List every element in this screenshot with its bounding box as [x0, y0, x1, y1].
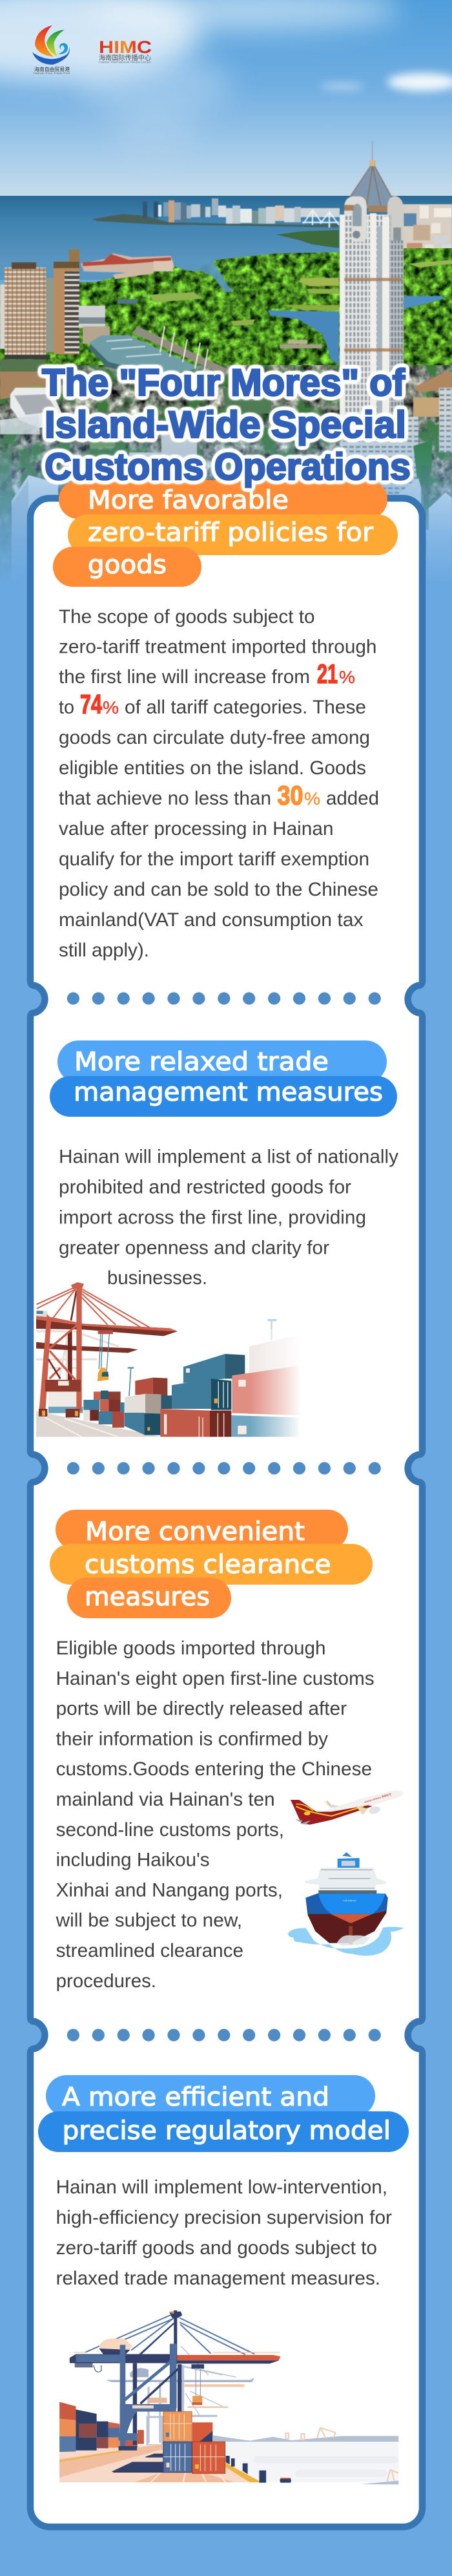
right-side distant city [403, 204, 452, 248]
fade-out to white [250, 1329, 302, 1439]
section 1 heading pills: goods [88, 551, 167, 580]
section 1 body text: % [103, 698, 119, 717]
small container stacks [83, 1391, 125, 1428]
logo: Hainan Free Trade Port [32, 25, 70, 75]
crane legs and braces [39, 1314, 51, 1409]
main title: Customs Operations [45, 446, 411, 488]
arena roof and boulevard [89, 326, 226, 378]
section 3 body text: Xinhai and Nangang ports, [56, 1879, 283, 1901]
upper boom [36, 1316, 178, 1336]
illustration: blue port crane and quay [59, 2310, 398, 2484]
hero photo: coastal city skyline [0, 0, 452, 585]
section 1 body text: that achieve no less than [59, 788, 271, 809]
section 2 body text: prohibited and restricted goods for [59, 1176, 351, 1198]
section 1 body text: 74 [80, 689, 102, 719]
logo: HIMC: Hainan International Media Center [99, 61, 152, 63]
hoist and load [99, 1333, 109, 1372]
quay ground [59, 2444, 262, 2482]
section 1 body text: added [326, 788, 379, 809]
stacked containers left [59, 2402, 144, 2452]
section 1 body text: mainland(VAT and consumption tax [59, 909, 364, 931]
logo: HIMC: 海南国际传播中心 [99, 54, 151, 62]
section 3 heading pills: More convenient [85, 1517, 305, 1547]
hoist and load [191, 2364, 204, 2369]
main title: Island-Wide Special [45, 404, 406, 446]
left residential towers [0, 249, 110, 359]
section 2 body text: Hainan will implement a list of nationally [59, 1146, 398, 1167]
section 2 heading pills [50, 1040, 397, 1117]
section 3 body text: Hainan's eight open first-line customs [56, 1668, 375, 1689]
section 1 body text: 30 [278, 780, 303, 810]
foreground city blocks [0, 365, 452, 558]
section 1 body text: goods can circulate duty-free among [59, 727, 370, 748]
section 3 body text: procedures. [56, 1970, 156, 1992]
section 3 body text: will be subject to new, [56, 1910, 242, 1931]
section 1 body text: value after processing in Hainan [59, 818, 333, 839]
section 3 body text: second-line customs ports, [56, 1819, 284, 1841]
section 1 body text: to [59, 697, 74, 718]
tall pyramid-topped tower [340, 141, 404, 421]
section 1 body text: qualify for the import tariff exemption [59, 849, 369, 870]
section 3 body text: ports will be directly released after [56, 1698, 347, 1720]
section 2 body text: businesses. [107, 1267, 207, 1289]
ground [36, 1411, 161, 1437]
icon: airliner [291, 1791, 404, 1824]
section 1 heading pills [53, 480, 398, 587]
logo: Hainan Free Trade Port: 海南自由贸易港 [34, 66, 70, 72]
section 1 body text: the first line will increase from [59, 666, 310, 688]
icon: container ship [288, 1852, 404, 1956]
section 1 body text: still apply). [59, 940, 149, 961]
main container stacks [125, 1335, 299, 1437]
section 2 body text: import across the first line, providing [59, 1207, 366, 1228]
section 4 heading pills [38, 2075, 409, 2152]
illustration: red port crane and containers [36, 1282, 302, 1439]
section 4 body text: zero-tariff goods and goods subject to [56, 2237, 377, 2259]
crane boom [70, 2354, 174, 2363]
section 3 body text: streamlined clearance [56, 1940, 243, 1961]
section 3 heading pills: measures [85, 1583, 210, 1612]
ghost cranes [106, 2346, 254, 2445]
icon: airliner: Hainan Airlines 海南航空 [364, 1791, 392, 1804]
logo: HIMC [99, 37, 152, 63]
section 3 heading pills: customs clearance [85, 1550, 331, 1579]
inner bay peninsula [276, 230, 339, 248]
section 1 heading pills: zero-tariff policies for [88, 518, 374, 547]
section 2 body text [59, 1146, 398, 1289]
section 4 heading pills: precise regulatory model [62, 2117, 391, 2146]
section 1 body text: % [304, 789, 320, 808]
section 4 body text [56, 2177, 392, 2289]
main title: The "Four Mores" of [42, 362, 406, 404]
ticket-shaped content panel [30, 498, 422, 2527]
section 4 body text: relaxed trade management measures. [56, 2268, 380, 2289]
lakes, channels and golf fairways [118, 257, 452, 364]
crane stays [85, 2314, 254, 2354]
foreground buildings and construction ground [0, 359, 452, 582]
section 2 heading pills: More relaxed trade [74, 1048, 329, 1077]
dotted divider 3 [67, 2029, 381, 2042]
sea [0, 196, 452, 280]
section 3 body text: customs.Goods entering the Chinese [56, 1758, 372, 1780]
icon: container ship: YUAN DONG HAI [343, 1899, 356, 1902]
machinery house [99, 2339, 132, 2351]
main title [42, 362, 411, 488]
crane legs and braces [120, 2345, 125, 2446]
section 1 body text: zero-tariff treatment imported through [59, 636, 377, 658]
red-roofed resort [81, 253, 174, 279]
section 1 body text: % [339, 668, 355, 687]
bollards [226, 2456, 266, 2483]
lower boom [36, 1342, 138, 1353]
section 1 heading pills: More favorable [88, 486, 289, 515]
section 3 body text: Eligible goods imported through [56, 1638, 326, 1659]
section 2 heading pills: management measures [74, 1078, 383, 1107]
front containers [163, 2412, 225, 2473]
dotted divider 2 [67, 1462, 381, 1475]
section 1 body text [59, 606, 379, 961]
background water and far shore [213, 2428, 398, 2484]
lamp posts [129, 1368, 131, 1396]
section 4 body text: Hainan will implement low-intervention, [56, 2177, 387, 2198]
section 3 body text: including Haikou's [56, 1850, 210, 1871]
dotted divider 1 [67, 992, 381, 1005]
fade from photo to blue [0, 410, 452, 585]
section 3 body text: their information is confirmed by [56, 1728, 328, 1749]
section 3 heading pills [50, 1510, 373, 1618]
section 4 body text: high-efficiency precision supervision for [56, 2207, 392, 2228]
section 1 body text: The scope of goods subject to [59, 606, 315, 628]
section 1 body text: policy and can be sold to the Chinese [59, 879, 378, 900]
green parkland with foliage [0, 246, 452, 368]
section 4 heading pills: A more efficient and [62, 2083, 329, 2112]
section 1 body text: of all tariff categories. These [125, 697, 366, 718]
section 3 body text [56, 1638, 375, 1992]
ghost crane [36, 1331, 118, 1404]
section 1 body text: 21 [317, 659, 338, 689]
crane stays [37, 1286, 150, 1328]
distant city skyline [92, 198, 340, 227]
section 1 body text: eligible entities on the island. Goods [59, 757, 366, 779]
logo: Hainan Free Trade Port: Hainan Free Trade Port [34, 72, 70, 75]
logo: HIMC: HIMC [99, 37, 152, 57]
sky with clouds [0, 0, 452, 197]
section 2 body text: greater openness and clarity for [59, 1237, 329, 1259]
section 3 body text: mainland via Hainan's ten [56, 1789, 275, 1810]
